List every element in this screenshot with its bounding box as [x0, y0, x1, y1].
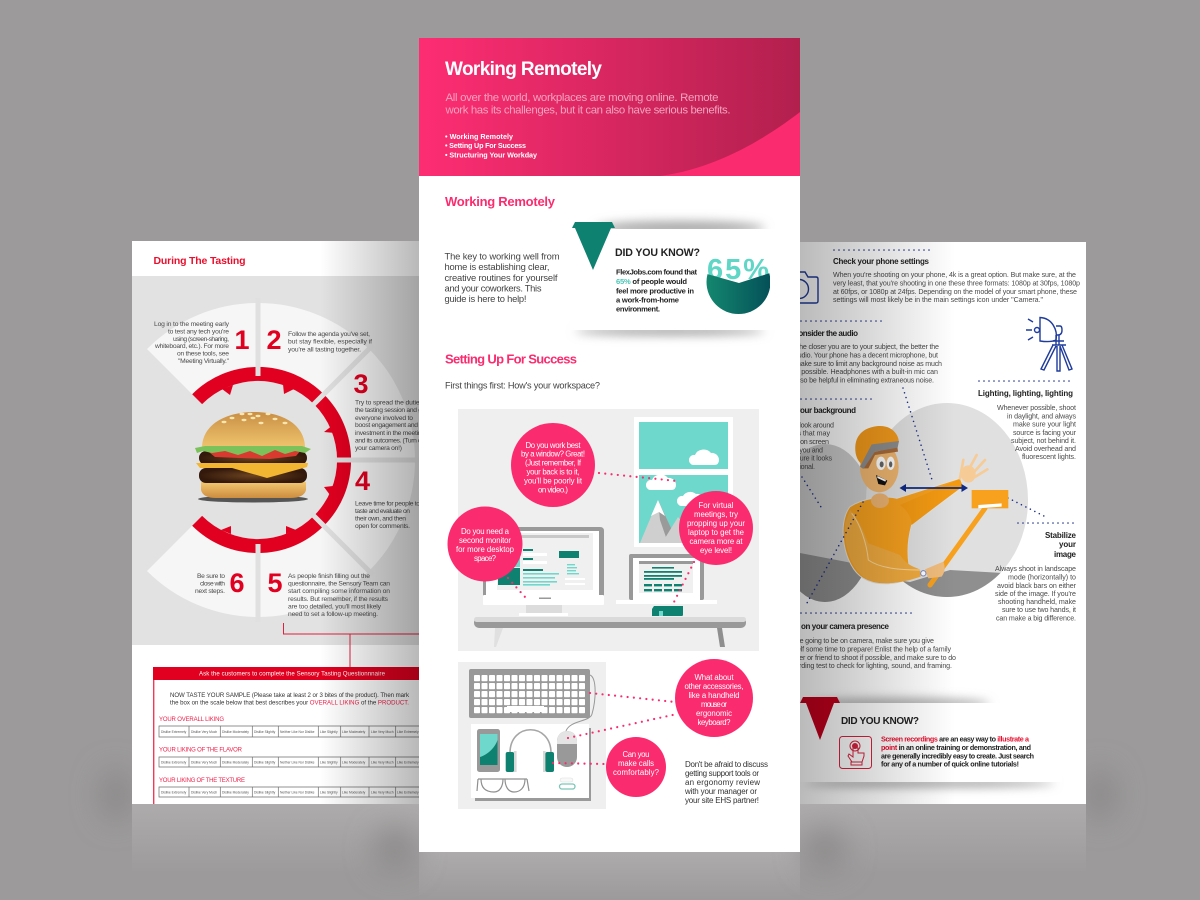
questionnaire: Ask the customers to complete the Sensory Tasting Questionnnaire	[199, 670, 386, 678]
callout: calls	[606, 737, 666, 797]
step 3 text: your camera on!)	[355, 445, 402, 452]
callout: did you know, 65%: environment.	[616, 304, 660, 314]
step 2 text: you're all tasting together.	[288, 346, 361, 354]
connector	[284, 623, 420, 667]
tip: stabilize: Always shoot in landscape	[995, 565, 1076, 573]
callout: accessories: ergonomic	[696, 709, 732, 718]
callout: second monitor	[448, 506, 522, 582]
tip: phone settings: settings will most likely be in the main settings icon under "Camera."	[833, 296, 1043, 304]
rating scale: flavor: Like Slightly	[320, 760, 338, 764]
tip: audio: Consider the audio	[793, 329, 858, 338]
tip: audio: make sure to limit any background noise as much	[795, 360, 942, 368]
icon: burger	[195, 412, 311, 502]
tip: background: professional.	[778, 463, 815, 471]
icon: red ribbon	[800, 697, 840, 740]
callout: accessories	[675, 659, 753, 737]
callout: accessories: like a handheld	[688, 691, 740, 700]
body: key to working well	[444, 250, 560, 304]
callout: second monitor: for more desktop	[456, 545, 515, 554]
step 4 number: 4	[355, 466, 370, 496]
rating scale: flavor	[159, 757, 430, 767]
callout: did you know, 65%: DID YOU KNOW?	[615, 247, 700, 259]
callout: did you know, 65%	[570, 221, 780, 335]
tip: background: make sure it looks	[778, 455, 832, 463]
window	[634, 417, 733, 547]
step 1 text: Log in to the meeting early	[154, 321, 230, 328]
panel: during the tasting	[132, 241, 430, 804]
step 3 text: and its outcomes. (Turn on	[355, 438, 425, 444]
callout: did you know, screen recordings: are generally incredibly easy to create. Just search	[881, 751, 1034, 760]
body: support tools: Don't be afraid to discuss	[685, 760, 768, 769]
step 5 number: 5	[267, 568, 283, 598]
step 3 text	[355, 400, 430, 452]
step 2 text	[288, 331, 372, 354]
tip: audio	[792, 329, 942, 384]
rating scale: texture: Like Moderately	[342, 790, 366, 794]
step 2 number: 2	[266, 325, 282, 355]
intro: work has its challenges, but it can also have serious benefits.	[444, 104, 730, 116]
body: support tools: with your manager or	[684, 787, 757, 796]
rating scale: texture: Like Very Much	[371, 790, 394, 794]
step 5 text: are too detailed, you'll most likely	[288, 604, 382, 610]
tip: audio: audio. Your phone has a decent microphone, but	[794, 352, 938, 360]
arrow: width span	[900, 484, 968, 492]
tip: lighting	[978, 389, 1077, 461]
headphones	[506, 730, 554, 772]
questionnaire: YOUR OVERALL LIKING	[159, 717, 224, 723]
tip: lighting: source is facing your	[1013, 429, 1077, 437]
rating scale: texture: Dislike Very Much	[191, 790, 217, 794]
tip: lighting: fluorescent lights.	[1022, 453, 1076, 461]
tip: camera presence	[780, 622, 956, 670]
callout: laptop height: propping up your	[687, 519, 745, 528]
phone	[477, 729, 500, 772]
step 4 text: their own, and then	[355, 516, 406, 522]
contents list: • Setting Up For Success	[445, 141, 526, 150]
cable	[566, 675, 595, 731]
body: key to working well: and your coworkers. This	[444, 282, 542, 294]
step 3 text: boost engagement and	[355, 422, 418, 429]
intro: All over the world, workplaces are moving online. Remote	[446, 92, 718, 104]
callout: did you know, screen recordings: DID YOU KNOW?	[841, 716, 919, 727]
rating scale: overall: Like Extremely	[397, 730, 419, 734]
step 3 text: Try to spread the duties of	[355, 400, 430, 407]
callout: accessories: mouse or	[701, 700, 727, 709]
step 2 text: Follow the agenda you've set,	[288, 331, 370, 338]
step 1 text: whiteboard, etc.). For more	[154, 343, 229, 350]
rating scale: overall: Dislike Extremely	[161, 730, 187, 734]
tip: stabilize: side of the image. If you're	[995, 590, 1076, 598]
tip: audio: The closer you are to your subject, the better the	[795, 343, 939, 351]
tip: lighting: subject, not behind it.	[1011, 437, 1076, 445]
callout: window	[511, 423, 595, 507]
tip: phone settings: very least, that you're shooting in one these three formats: 1080p at 30fps, 1080p	[833, 280, 1080, 288]
callout: laptop height: camera more at	[690, 537, 743, 546]
tip: phone settings	[833, 257, 1080, 304]
step 5 text	[288, 573, 390, 618]
tip: lighting: Lighting, lighting, lighting	[978, 389, 1073, 398]
illustration: accessories	[458, 659, 753, 809]
step 1 number: 1	[234, 325, 250, 355]
illustration: selfie video	[800, 387, 1045, 604]
callout: did you know, screen recordings: Screen recordings are an easy way to illustrate a	[881, 735, 1030, 744]
questionnaire: NOW TASTE YOUR SAMPLE (Please take at least 2 or 3 bites of the product). Then mark	[170, 692, 410, 699]
tip: lighting: make sure your light	[1013, 421, 1076, 429]
step 5 text: start compiling some information on	[288, 588, 390, 595]
callout: accessories: What about	[694, 673, 734, 682]
tip: background: behind you and	[778, 446, 823, 454]
rating scale: overall: Like Moderately	[342, 730, 366, 734]
step 4 text	[355, 501, 420, 530]
step 1 text: to test any tech you're	[168, 328, 229, 336]
callout: did you know, screen recordings	[800, 697, 1062, 787]
questionnaire: the box on the scale below that best describes your OVERALL LIKING of the PRODUCT.	[170, 700, 409, 706]
icon: touch screen	[840, 736, 872, 768]
panel: video tips	[770, 242, 1086, 804]
callout: calls: Can you	[622, 750, 650, 759]
step 3 text: everyone involved to	[355, 415, 413, 422]
tip: stabilize: mode (horizontally) to	[1008, 574, 1076, 582]
tip: phone settings: Check your phone settings	[833, 257, 930, 266]
step 6 text: next steps.	[195, 588, 225, 595]
body: key to working well: creative routines for yourself	[444, 272, 558, 283]
reflections below panels	[132, 804, 1086, 900]
callout: laptop height: meetings, try	[694, 510, 738, 519]
keyboard	[469, 669, 590, 718]
body: key to working well: The key to working well from	[444, 250, 560, 262]
step 6 text: close with	[200, 580, 225, 588]
rating scale: texture: Like Slightly	[320, 790, 338, 794]
rating scale: overall: Neither Like Nor Dislike	[280, 730, 315, 734]
tip: background	[772, 406, 856, 471]
rating scale: flavor: Dislike Very Much	[191, 760, 217, 764]
tip: phone settings: When you're shooting on your phone, 4k is a great option. But make sure, at the	[833, 271, 1076, 279]
rating scale: flavor: Neither Like Nor Dislike	[280, 760, 315, 764]
step 1 text: on these tools, see	[177, 350, 229, 358]
callout: did you know, screen recordings: for any of a number of quick online tutorials!	[881, 760, 1019, 769]
callout: did you know, screen recordings: point in an online training or demonstration, and	[881, 743, 1031, 752]
body: first things first: First things first: How's your workspace?	[445, 380, 600, 390]
rating scale: texture	[159, 787, 430, 797]
callout: window: by a window? Great!	[521, 450, 585, 459]
rating scale: overall	[159, 726, 430, 737]
character	[843, 426, 1008, 585]
callout: accessories: keyboard?	[698, 718, 731, 727]
tip: stabilize: your	[1059, 540, 1076, 549]
callout: laptop height: laptop to get the	[688, 528, 744, 537]
stat: 65%: 65%	[707, 254, 769, 286]
contents list	[445, 132, 537, 160]
callout: laptop height: eye level!	[700, 546, 732, 555]
callout: laptop height	[679, 491, 753, 565]
step 5 text: results. But remember, if the results	[288, 596, 389, 603]
callout: second monitor: space?	[474, 554, 497, 563]
icon: studio light	[1026, 318, 1072, 371]
tip: camera presence: If you're going to be on camera, make sure you give	[780, 637, 934, 645]
rating scale: texture: Neither Like Nor Dislike	[280, 790, 315, 794]
callout: did you know, 65%: a work-from-home	[616, 296, 679, 304]
tip: lighting: Whenever possible, shoot	[997, 404, 1076, 412]
monitor	[483, 527, 604, 616]
step 5 text: questionnaire, the Sensory Team can	[288, 580, 390, 588]
step 6 text	[195, 573, 225, 595]
rating scale: overall: Dislike Slightly	[254, 730, 276, 734]
body: support tools: your site EHS partner!	[685, 796, 759, 805]
step 6 number: 6	[229, 568, 245, 598]
tip: background: appear on screen	[778, 438, 829, 446]
tip: phone settings: at 60fps, or 1080p at 24fps. Depending on the model of your smart phone, these	[833, 288, 1077, 296]
step 3 text: the tasting session and get	[355, 407, 427, 414]
callout: second monitor: second monitor	[459, 536, 511, 545]
body: support tools	[684, 760, 768, 805]
step 4 text: taste and evaluate on	[355, 508, 410, 515]
tip: camera presence: yourself some time to prepare! Enlist the help of a family	[780, 646, 951, 654]
heading: setting up: Setting Up For Success	[445, 352, 577, 366]
callout: laptop height: For virtual	[698, 501, 734, 510]
rating scale: texture: Like Extremely	[397, 790, 419, 794]
tip: audio: also be helpful in eliminating extraneous noise.	[795, 376, 934, 384]
questionnaire	[153, 667, 430, 804]
body: support tools: getting support tools or	[685, 769, 759, 778]
tip: background: Take a look around	[778, 422, 834, 430]
callout: calls: comfortably?	[613, 768, 660, 777]
rating scale: overall: Dislike Moderately	[222, 730, 249, 734]
body: support tools: an ergonomy review	[685, 778, 760, 787]
rating scale: flavor: Dislike Extremely	[161, 760, 187, 764]
questionnaire: YOUR LIKING OF THE TEXTURE	[159, 778, 245, 784]
contents list: • Working Remotely	[445, 132, 513, 141]
step 1 text: "Meeting Virtually."	[178, 358, 230, 365]
step 4 text: open for comments.	[355, 523, 410, 530]
title: Working Remotely	[445, 59, 602, 80]
radial diagram	[147, 298, 420, 622]
tip: stabilize	[995, 531, 1077, 623]
paper clip	[560, 778, 575, 789]
tip: background: Check your background	[772, 406, 856, 415]
stat: 65%	[706, 258, 770, 314]
step 4 text: Leave time for people to	[355, 501, 420, 508]
callout: accessories: other accessories,	[684, 682, 744, 691]
tip: camera presence: Work on your camera presence	[781, 622, 890, 631]
callout: window: your back is to it,	[526, 468, 580, 477]
rating scale: overall: Dislike Very Much	[191, 730, 217, 734]
rating scale: flavor: Like Extremely	[397, 760, 419, 764]
heading: working remotely: Working Remotely	[445, 194, 556, 209]
tip: stabilize: Stabilize	[1045, 531, 1077, 540]
step 6 text: Be sure to	[197, 573, 225, 580]
tip: audio: as possible. Headphones with a built-in mic can	[792, 368, 938, 376]
tip: stabilize: image	[1054, 550, 1077, 559]
glasses	[477, 779, 529, 792]
mouse	[557, 731, 577, 767]
desk	[474, 617, 746, 647]
callout: second monitor: Do you need a	[461, 527, 510, 536]
step 1 text	[154, 321, 230, 365]
tip: background: for things that may	[772, 430, 830, 438]
tip: stabilize: sure to use two hands, it	[1002, 606, 1076, 614]
tip: stabilize: avoid black bars on either	[997, 582, 1077, 590]
questionnaire: YOUR LIKING OF THE FLAVOR	[159, 748, 243, 754]
step 1 text: using (screen-sharing,	[173, 336, 229, 343]
body: key to working well: home is establishing clear,	[444, 261, 550, 272]
rating scale: overall: Like Slightly	[320, 730, 338, 734]
icon: camera	[782, 272, 818, 303]
illustration: desk setup	[448, 409, 759, 651]
rating scale: texture: Dislike Moderately	[222, 790, 249, 794]
callout: calls: make calls	[618, 759, 654, 768]
rating scale: flavor: Like Moderately	[342, 760, 366, 764]
callout: did you know, 65%: feel more productive in	[616, 286, 694, 296]
callout: window: you'll be poorly lit	[524, 476, 583, 485]
callout: window: (Just remember, If	[525, 459, 582, 468]
rating scale: flavor: Like Very Much	[371, 760, 394, 764]
step 2 text: but stay flexible, especially if	[288, 338, 372, 346]
sheet	[471, 724, 591, 801]
tip: lighting: in daylight, and always	[1007, 412, 1076, 420]
tip: camera presence: member or friend to shoot if possible, and make sure to do	[780, 654, 956, 662]
rating scale: flavor: Dislike Slightly	[254, 760, 276, 764]
callout: did you know, 65%: 65% of people would	[616, 277, 687, 286]
rating scale: texture: Dislike Slightly	[254, 790, 276, 794]
tip: lighting: Avoid overhead and	[1015, 445, 1076, 453]
callout: window: on video.)	[538, 485, 568, 494]
rating scale: flavor: Dislike Moderately	[222, 760, 249, 764]
icon: teal ribbon	[572, 222, 615, 270]
step 3 number: 3	[353, 369, 369, 399]
tip: camera presence: a recording test to check for lighting, sound, and framing.	[780, 662, 952, 670]
rating scale: texture: Dislike Extremely	[161, 790, 187, 794]
contents list: • Structuring Your Workday	[445, 150, 537, 160]
laptop	[616, 554, 717, 616]
header band	[419, 38, 800, 176]
intro	[444, 92, 730, 116]
rating scale: overall: Like Very Much	[371, 730, 394, 734]
tip: stabilize: shooting handheld, make	[998, 598, 1076, 606]
body: key to working well: guide is here to help!	[444, 293, 526, 304]
panel: working remotely	[419, 38, 800, 852]
step 3 text: investment in the meeting	[355, 430, 425, 437]
heading: during the tasting: During The Tasting	[154, 255, 246, 267]
step 5 text: need to set a follow-up meeting.	[288, 611, 378, 618]
callout: window: Do you work best	[526, 441, 581, 450]
callout: did you know, 65%: FlexJobs.com found that	[616, 268, 697, 276]
tip: stabilize: can make a big difference.	[996, 615, 1076, 623]
step 5 text: As people finish filling out the	[288, 573, 370, 580]
